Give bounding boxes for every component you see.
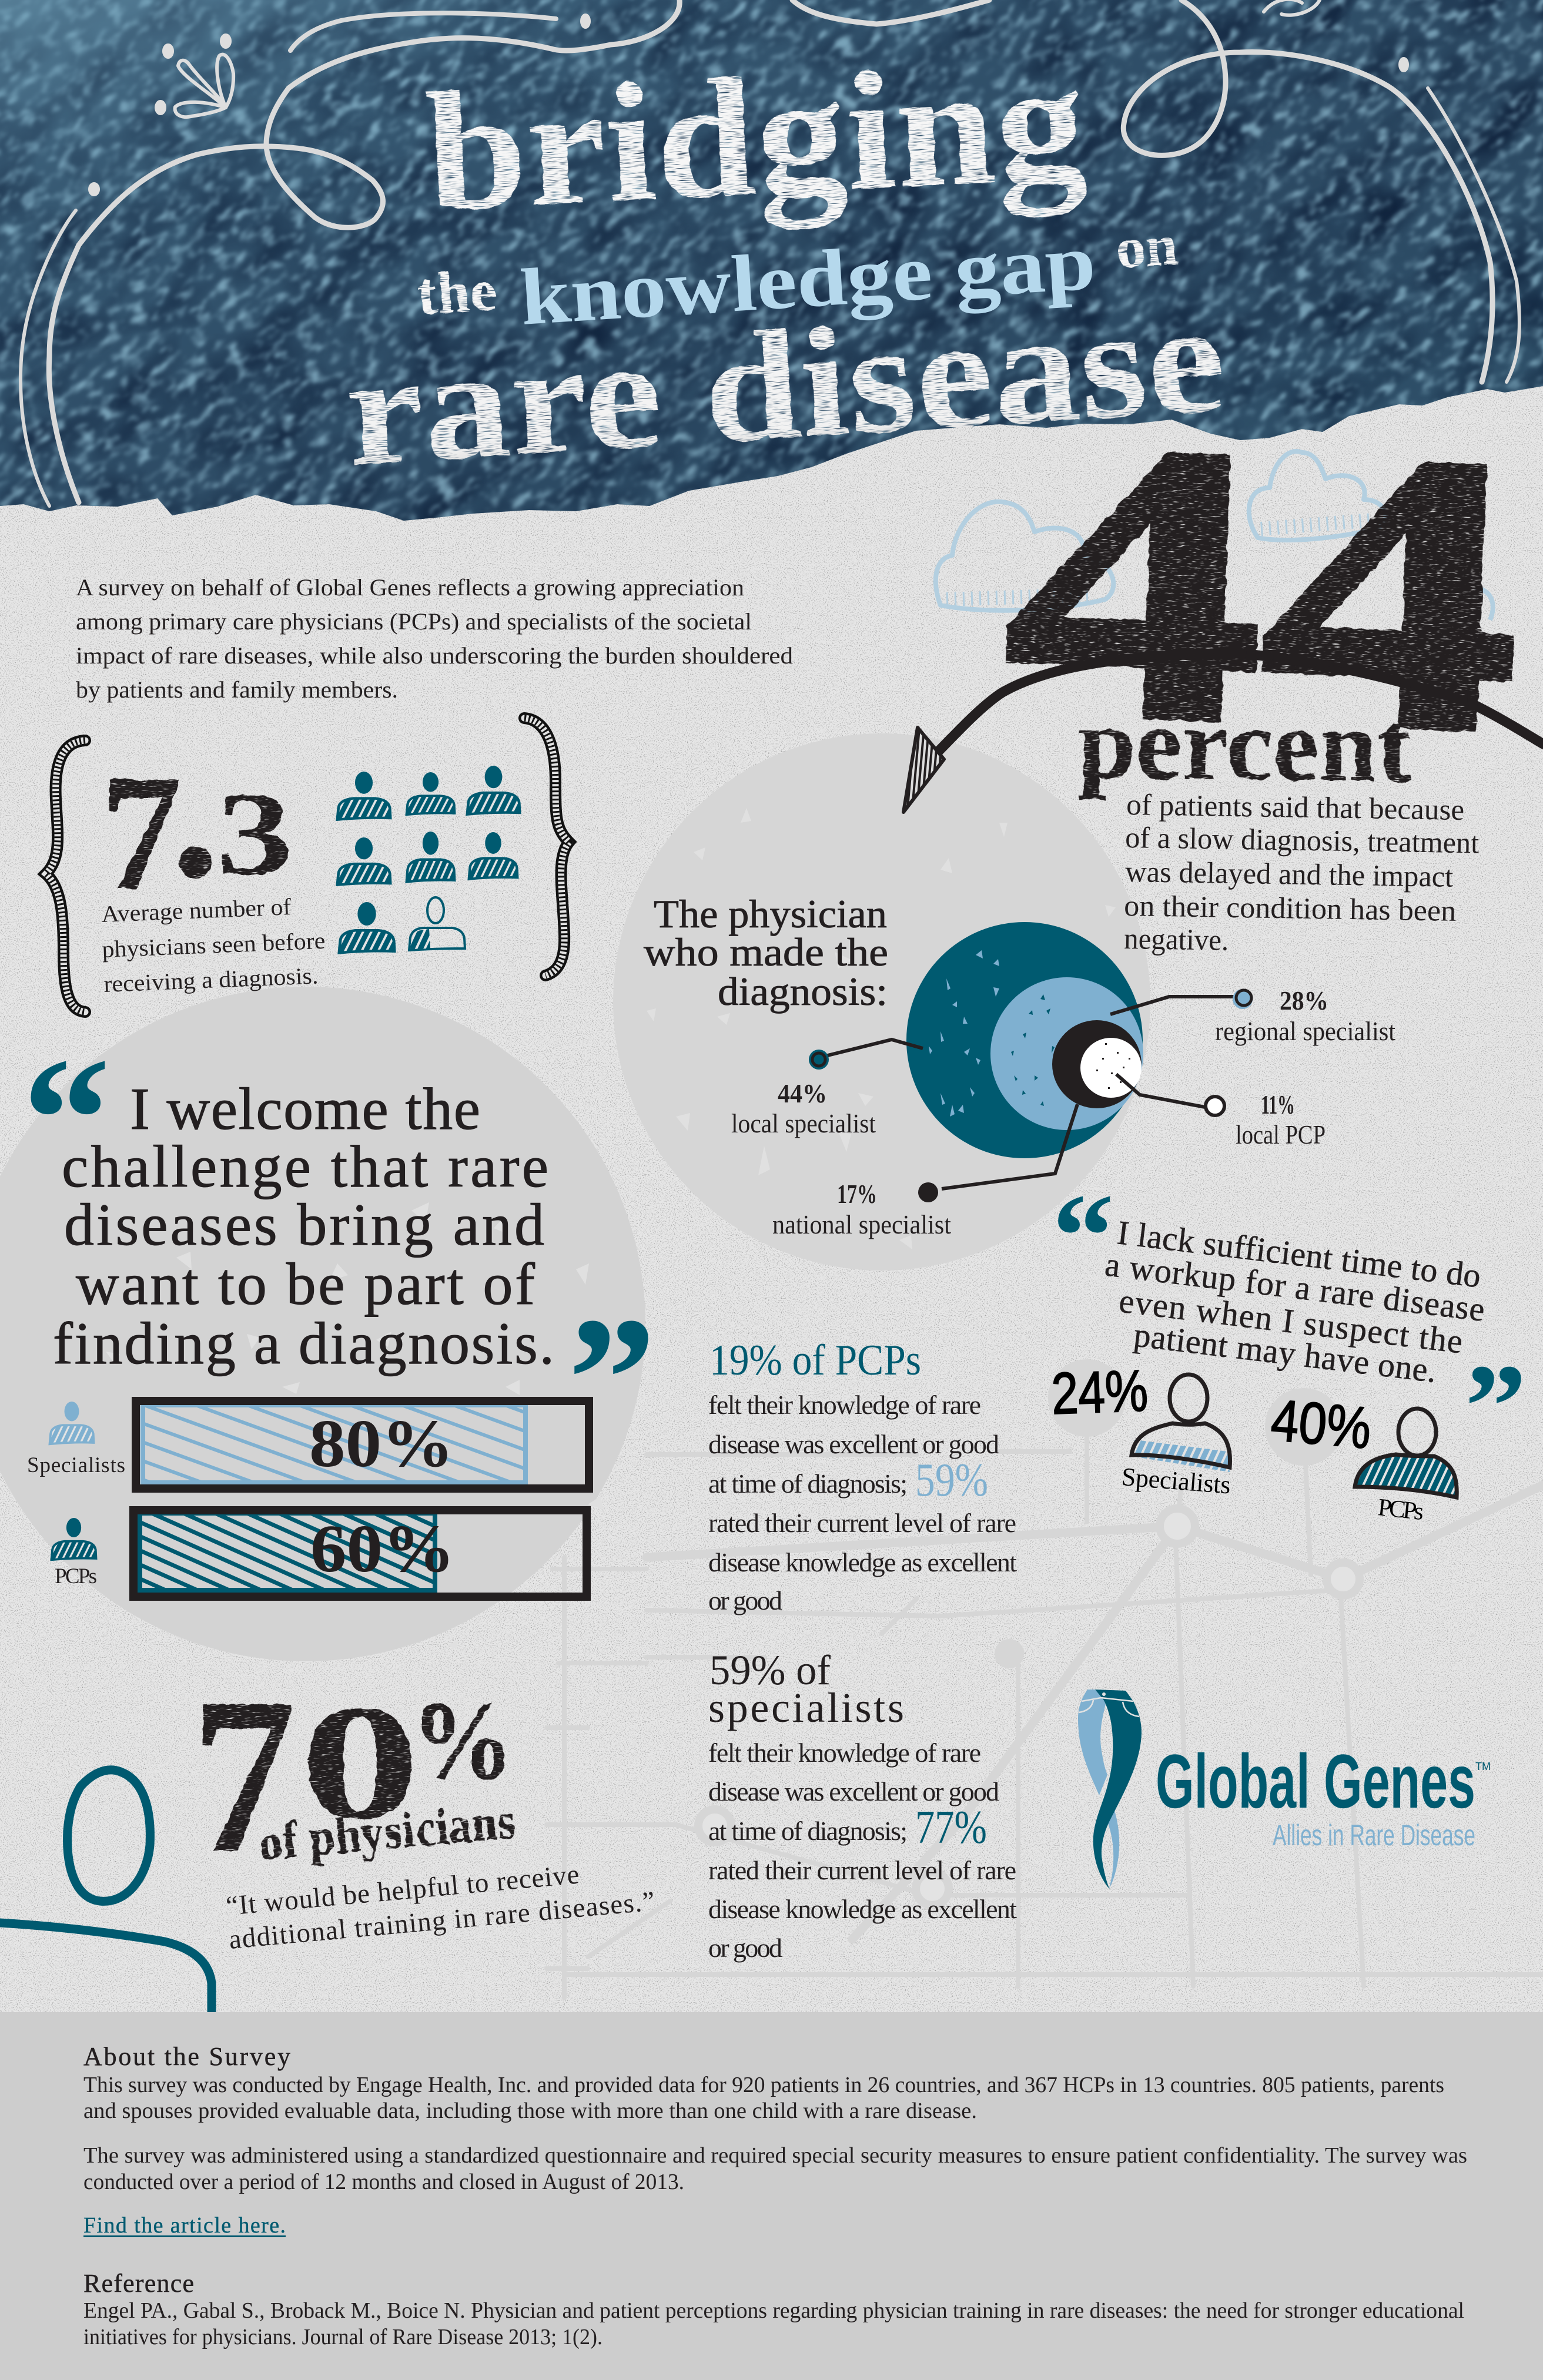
intro text [76,574,793,703]
quote text: patient may have one. [1132,1315,1438,1390]
44 percent description [1124,789,1480,957]
title: on: on [1114,214,1179,280]
large quote [22,1021,656,1476]
body text: 59% [915,1454,988,1506]
body text: at time of diagnosis; [708,1816,908,1846]
body text [708,1390,1017,1615]
heading: the physician who made the diagnosis: who made the [644,930,888,974]
reference text: Engel PA., Gabal S., Broback M., Boice N. Physician and patient perceptions regarding physician training in rare diseases: the need for stronger educational [83,2298,1464,2323]
gray circle behind chart [613,733,1150,1271]
leader: 28% [1110,989,1253,1014]
value 80%: 80% [309,1406,454,1481]
value 24%: 24% [1050,1357,1149,1427]
heading: specialists [708,1684,904,1731]
background road map [547,1398,1543,1998]
about text: conducted over a period of 12 months and closed in August of 2013. [83,2170,684,2194]
quote text [53,1076,554,1377]
right brace [524,718,569,976]
stat 7.3 caption: physicians seen before [102,927,326,963]
stat 7.3 caption [101,893,326,997]
body text: rated their current level of rare [708,1855,1016,1885]
body text: disease knowledge as excellent [708,1547,1017,1577]
about heading: About the Survey [83,2042,290,2071]
quote text: challenge that rare [62,1134,548,1200]
about text: The survey was administered using a standardized questionnaire and required special security measures to ensure patient confidentiality. The survey was [83,2143,1467,2168]
bar chart: PCPs 60% [52,1510,587,1597]
body text: disease knowledge as excellent [708,1894,1017,1924]
about text [83,2073,1467,2194]
paper specks in gray circles [106,808,1116,1649]
circle 28% regional specialist [990,977,1143,1130]
body text: at time of diagnosis; [708,1469,908,1499]
denim header with torn edge [0,0,1543,521]
quote mark open: “ [1052,1169,1114,1303]
fill 60% [140,1513,435,1590]
big number 44: 44 [999,358,1528,814]
body text: disease was excellent or good [708,1776,999,1806]
title [341,26,1229,499]
curved arrow from 44 percent [903,653,1543,812]
intro text: A survey on behalf of Global Genes reflects a growing appreciation [76,574,744,601]
body text: 77% [915,1802,987,1853]
trademark: TM [1475,1761,1491,1772]
title: bridging: bridging [421,26,1090,250]
label: 44% local specialist: local specialist [731,1108,876,1138]
stat 70% of physicians [191,1652,657,1955]
quote mark close: ” [1465,1340,1527,1473]
teal doodle circle and curve [0,1770,212,2012]
label: specialists: Specialists [1120,1462,1231,1500]
stat 7.3 caption: Average number of [101,893,292,927]
gray circle behind large quote [0,987,645,1661]
circle 44% local specialist [906,922,1143,1158]
number 70: 7 [191,1652,297,1899]
stat 7.3 [100,698,293,925]
quote text: finding a diagnosis. [53,1310,554,1377]
leader: 44% [809,1040,923,1070]
intro text: by patients and family members. [76,676,398,703]
label: 44% local specialist [731,1078,876,1138]
label: specialists: Specialists [27,1453,125,1477]
quote text: want to be part of [76,1251,535,1318]
circle 17% national specialist [1052,1020,1142,1108]
quote text: a workup for a rare disease [1103,1245,1487,1329]
body text: felt their knowledge of rare [708,1738,981,1768]
stat 7.3 caption: receiving a diagnosis. [103,962,319,997]
number 70: % [411,1679,514,1802]
balloons behind percentages [1048,1359,1343,1466]
value 60%: 60% [310,1511,455,1586]
flourishes around title [21,0,1519,506]
heading: 19% of PCPs [709,1336,921,1385]
heading [708,1647,904,1731]
about text: and spouses provided evaluable data, including those with more than one child with a rare disease. [83,2099,977,2123]
quote mark close: ” [568,1281,656,1476]
heading: the physician who made the diagnosis: diagnosis: [718,969,888,1014]
right quote [1052,1169,1527,1473]
icon: PCP outline [1355,1409,1457,1497]
percent: percent [1077,686,1413,804]
icon: jeans ribbon [1078,1690,1142,1889]
left brace [46,740,85,1012]
label: 28% regional specialist [1215,985,1395,1046]
label: 17% national specialist [772,1179,951,1239]
cloud doodles [936,451,1493,620]
body text: felt their knowledge of rare [708,1390,981,1420]
label: 28% regional specialist: 28% [1280,985,1328,1015]
title: the: the [416,257,498,327]
icon: 7.3 physicians pictogram [337,766,520,953]
bar frame [133,1510,587,1597]
label: 11% local PCP [1236,1090,1326,1149]
stat 7.3: 3 [216,767,293,900]
label: 17% national specialist: 17% [837,1179,877,1209]
body text [708,1738,1017,1963]
body text: rated their current level of rare [708,1508,1016,1538]
fill 80% [143,1405,526,1483]
label: 11% local PCP: local PCP [1236,1119,1326,1149]
quote mark open: “ [22,1021,111,1216]
label: 17% national specialist: national specialist [772,1209,951,1239]
label: PCPs: PCPs [1377,1494,1425,1526]
title: knowledge gap: knowledge gap [517,217,1098,342]
chart: nested circles physician breakdown [644,891,1395,1239]
leader: 17% [918,1104,1077,1202]
reference heading: Reference [83,2269,194,2298]
reference text [83,2298,1464,2349]
leader: 11% [1116,1074,1224,1115]
stat 7.3: 7 [100,741,182,925]
of physicians: of physicians [256,1792,518,1872]
number 70 [191,1652,514,1899]
stat 24% specialists [1050,1357,1231,1500]
icon: specialist outline [1132,1375,1230,1472]
circle 11% local PCP [1080,1038,1142,1098]
quote text: diseases bring and [64,1192,544,1258]
heading: 59% of [709,1647,831,1694]
training quote: additional training in rare diseases.” [227,1886,657,1955]
body text: or good [708,1933,782,1963]
stat 40% PCPs [1268,1387,1457,1526]
bar frame [136,1401,589,1489]
circle speckles [929,950,999,1117]
stat 7.3: . [170,698,220,919]
quote text: I lack sufficient time to do [1115,1213,1483,1295]
label: 28% regional specialist: regional specialist [1215,1016,1395,1046]
bar chart: specialists 80% [27,1401,589,1489]
label: 44% local specialist: 44% [778,1078,827,1108]
about text: This survey was conducted by Engage Health, Inc. and provided data for 920 patients in 26 countries, and 367 HCPs in 13 countries. 805 patients, parents [83,2073,1444,2097]
value 40%: 40% [1268,1387,1374,1461]
training quote: “It would be helpful to receive [225,1859,581,1922]
article link: Find the article here. [83,2213,286,2238]
block: 19% of PCPs [708,1336,1017,1615]
body text: disease was excellent or good [708,1429,999,1459]
heading: the physician who made the diagnosis [644,891,888,1014]
heading: the physician who made the diagnosis: The physician [654,891,887,936]
44 percent description: on their condition has been [1124,890,1457,928]
label: PCPs: PCPs [55,1564,97,1588]
44 percent description: of patients said that because [1126,789,1465,827]
quote text: I welcome the [130,1076,480,1142]
intro text: impact of rare diseases, while also underscoring the burden shouldered [76,642,793,669]
44 percent description: of a slow diagnosis, treatment [1125,822,1480,860]
44 percent description: negative. [1124,923,1229,957]
quote text [1103,1213,1487,1390]
44 percent description: was delayed and the impact [1125,856,1454,894]
reference text: initiatives for physicians. Journal of Rare Disease 2013; 1(2). [83,2325,603,2349]
icon: PCP [52,1518,96,1560]
label: 11% local PCP: 11% [1261,1090,1295,1119]
body text: or good [708,1585,782,1615]
intro text: among primary care physicians (PCPs) and specialists of the societal [76,608,752,635]
title: rare disease: rare disease [341,270,1229,499]
icon: specialist [50,1402,93,1444]
quote text: even when I suspect the [1117,1281,1465,1361]
block: 59% of specialists [708,1647,1017,1963]
footer panel [0,2012,1543,2380]
floral ornaments [90,0,1407,195]
number 70: 0 [300,1671,420,1853]
logo: Global Genes [1078,1690,1491,1889]
